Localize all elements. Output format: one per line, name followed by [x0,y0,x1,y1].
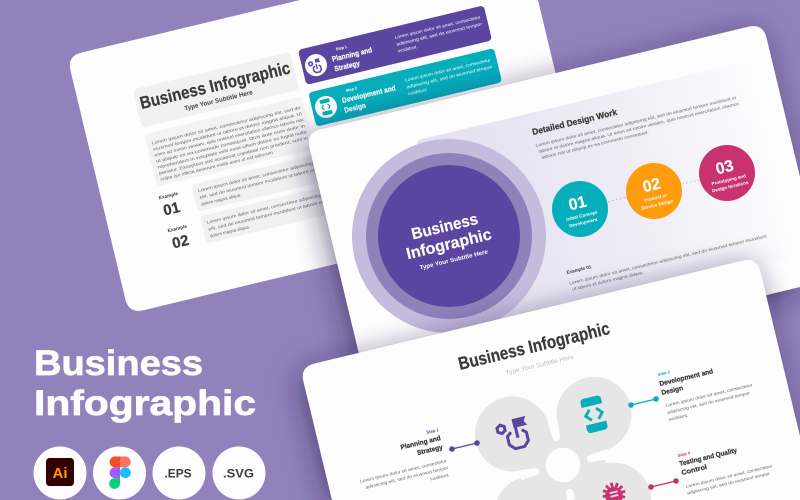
icon: phone with code brackets [580,395,608,434]
step 2 card: adipiscing elit, sed do eiusmod tempor [406,64,493,90]
example 01 text: Example 01 [566,264,592,275]
example 01: Example [158,191,179,201]
slide one paragraph: Lorem ipsum dolor sit amet, consectetur adipiscing elit, sed do [151,105,302,146]
icon: figma [93,446,146,500]
step 1 card [298,5,492,85]
slide one title box: Type Your Subtitle Here [184,89,254,112]
main heading: Infographic [34,383,256,423]
badge: eps: .EPS [164,466,192,480]
step 1 card: Lorem ipsum dolor sit amet, consectetur [394,14,481,40]
step 2 label: Design [661,385,684,397]
slide one paragraph: pariatur. Excepteur sint occaecat cupidatat non proident, sunt in [158,135,309,176]
slide three subtitle: Type Your Subtitle Here [505,354,575,377]
concentric circle with title: Infographic [405,226,493,263]
circle 01 [552,181,608,237]
step 1 label: adipiscing elit, sed do eiusmod tempor [365,465,449,490]
example 01: 01 [162,199,182,220]
slide one paragraph: enim ad minim veniam, quis nostrud exercitation ullamco laboris nisi [154,117,304,158]
circle 02: Service Design [641,198,674,211]
icon: adobe illustrator: Ai [52,465,68,482]
step 2 card: Step 2 [345,86,357,93]
example 02: Lorem ipsum dolor sit amet, consectetur adipiscing [206,192,323,225]
concentric circle with title [352,139,546,333]
step 1 card: incididunt. [397,44,418,54]
step 1 label: Planning and [400,435,441,452]
panel: slide two [309,26,800,388]
main heading: Business [34,343,203,383]
step 2 label: Development and [659,368,714,388]
description paragraph: labore et dolore magna aliqua. Ut enim ad minim veniam, quis nostrud exercitation ullamco [538,101,740,154]
connector step 2 [628,396,659,408]
circle 01: Development [569,217,598,228]
step 2 card: Design [343,101,367,115]
step 1 label [360,427,450,490]
slide three title: Business Infographic [456,318,612,374]
step 2 card [308,48,502,127]
step 1 card: Step 1 [335,45,347,51]
connector step 1 [449,440,480,452]
slide one paragraph: eiusmod tempor incididunt ut labore et dolore magna aliqua. Ut [153,111,303,152]
icon: step 2 phone [319,98,333,116]
step 2 label [657,368,753,422]
example 01: elit, sed do eiusmod tempor incididunt ut labore et [199,167,316,200]
step 1 label: Step 1 [426,427,440,435]
step 4 label: Step 4 [677,450,691,458]
icon: step 1 strategy [308,58,323,74]
panel: slide one [70,0,584,311]
circle 01: 01 [567,194,588,214]
step 4 label: adipiscing elit, sed do eiusmod tempor [687,471,771,495]
slide one paragraph: culpa qui officia deserunt mollit anim id est laborum. [160,150,275,182]
slide one paragraph: ut aliquip ex ea commodo consequat. Duis aute irure dolor in [155,123,306,164]
step 1 card: Planning and [331,45,373,64]
icon: adobe illustrator [34,446,86,500]
step 2 label: Lorem ipsum dolor sit amet, consectetur [665,382,753,408]
circle 02: Product or [644,193,668,203]
circle 03: Design Iterations [712,180,749,193]
step 1 label: Lorem ipsum dolor sit amet, consectetur [360,458,448,484]
description paragraph: Lorem ipsum dolor sit amet, consectetur adipiscing elit, sed do eiusmod tempor incididunt ut [535,95,737,148]
step 2 label: incididunt. [668,412,688,422]
description paragraph: laboris nisi ut aliquip ex ea commodo consequat. [541,129,649,160]
example 01 text [566,223,770,292]
circle 03 [699,145,755,201]
circle 02: 02 [641,176,662,196]
step 1 label: Strategy [417,444,444,457]
example 01 text: ut labore et dolore magna aliqua. [572,270,644,292]
slide one paragraph: reprehenderit in voluptate velit esse cillum dolore eu fugiat nulla [157,129,307,170]
badge: svg [212,446,266,500]
step 4 label [677,447,773,495]
step 2 card: Lorem ipsum dolor sit amet, consectetur [404,57,492,83]
connector step 4 [648,478,679,490]
example 02: dolore magna aliqua. [209,224,250,239]
step 4 label: Control [681,464,708,477]
step 1 card: Strategy [333,58,361,73]
circle 01: Initial Concept [566,210,598,222]
description paragraph [535,95,742,161]
badge: eps [152,446,206,500]
example 01 [158,155,322,220]
step 1 card: adipiscing elit, sed do eiusmod tempor [396,21,483,47]
step 2 card: incididunt. [408,87,428,96]
example 01 text: Lorem ipsum dolor sit amet, consectetur adipiscing elit, sed do eiusmod tempor incididunt [569,233,768,286]
dashed connectors [608,180,700,202]
icon: planning flag and hexagon [496,416,532,452]
icon: quality gear [603,483,625,500]
step 2 label: adipiscing elit, sed do eiusmod tempor [667,390,751,415]
heading: detailed design work: Detailed Design Work [531,107,618,137]
example 02: elit, sed do eiusmod tempor incididunt ut labore et [208,199,325,232]
example 02: 02 [170,232,191,252]
example 02 [166,186,331,253]
example 01: dolore magna aliqua. [201,192,242,207]
circle 03: Prototyping and [711,173,747,186]
main heading [34,343,256,423]
concentric circle with title: Type Your Subtitle Here [419,249,489,272]
panel: slide three [303,260,800,500]
circle 02 [626,163,682,219]
step 1 label: incididunt. [430,472,450,482]
step 4 label: Testing and Quality [679,447,738,468]
slide one paragraph [144,96,314,187]
slide one title box: Business Infographic [138,58,292,113]
badge: svg: .SVG [223,466,254,480]
example 01: Lorem ipsum dolor sit amet, consectetur adipiscing [197,160,314,193]
example 02: Example [167,224,188,234]
circle 03: 03 [714,158,735,178]
step 4 label: Lorem ipsum dolor sit amet, consectetur [685,463,773,489]
step 2 label: Step 2 [657,369,671,377]
concentric circle with title: Business [410,211,480,243]
four petal diagram [475,377,651,500]
step 2 card: Development and [341,83,397,105]
